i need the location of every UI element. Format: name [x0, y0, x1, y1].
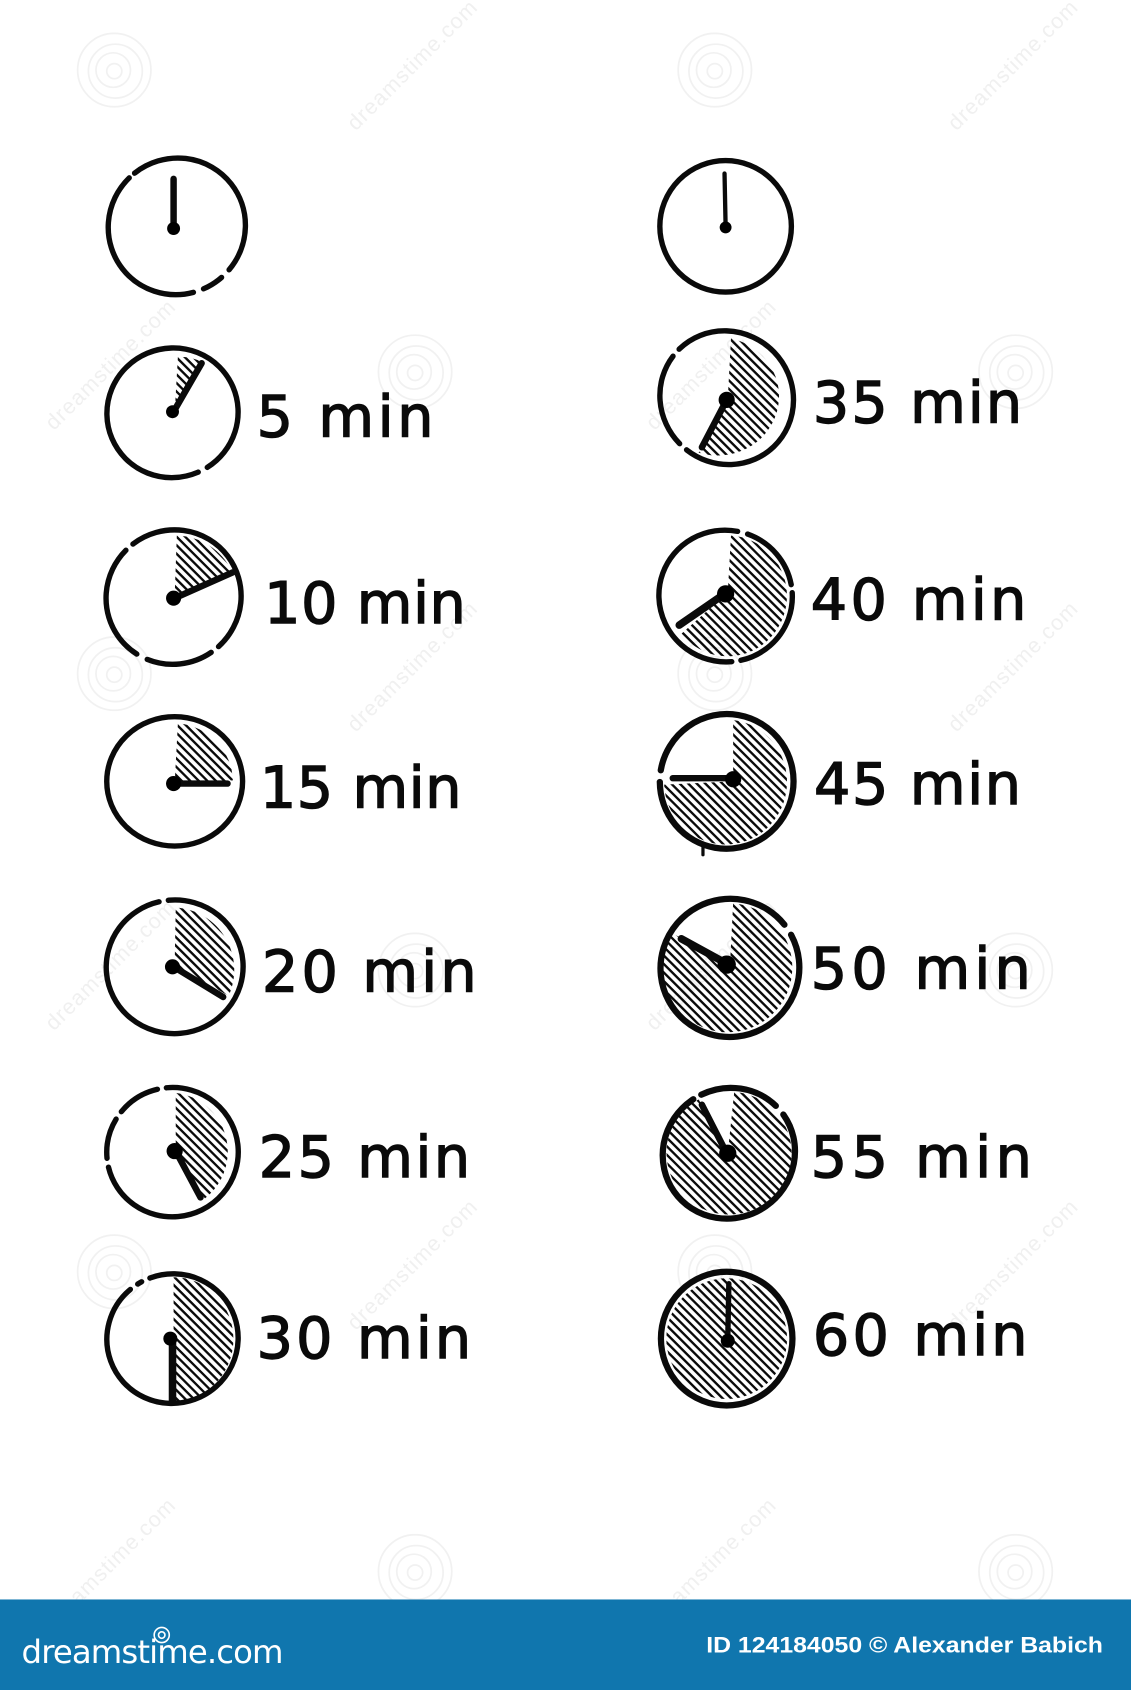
label: 20 min: 20 min [262, 940, 477, 1006]
clock: 15 min [107, 717, 243, 846]
clock: 40 min [640, 511, 811, 681]
label: 35 min: 35 min [813, 371, 1022, 436]
label: 55 min: 55 min [811, 1125, 1032, 1191]
footer bar [0, 1599, 1131, 1690]
watermark pattern: dreamstime.com [40, 294, 181, 435]
clock: 60 min [661, 1272, 792, 1405]
clock: right column start, 0 min [660, 161, 791, 292]
clock: 5 min [87, 328, 258, 498]
label: 10 min: 10 min [264, 571, 466, 637]
label: 60 min: 60 min [813, 1303, 1027, 1369]
clock: 45 min [649, 703, 804, 859]
label: 45 min: 45 min [814, 752, 1021, 818]
label: 40 min: 40 min [811, 568, 1026, 634]
label: 15 min: 15 min [260, 755, 461, 821]
image credit: ID 124184050 © Alexander Babich [706, 1632, 1103, 1657]
clock: 30 min [89, 1255, 256, 1422]
watermark pattern: dreamstime.com [40, 894, 181, 1035]
clock: left column start, 0 min [81, 130, 273, 322]
watermark pattern: dreamstime.com [342, 596, 483, 736]
clock: 50 min [636, 874, 824, 1061]
label: 30 min: 30 min [257, 1306, 471, 1372]
watermark pattern: dreamstime.com [640, 1492, 781, 1633]
watermark pattern: dreamstime.com [942, 596, 1083, 736]
clock: 55 min [637, 1062, 821, 1245]
label: 5 min: 5 min [257, 385, 433, 451]
watermark pattern: dreamstime.com [942, 1194, 1083, 1335]
watermark pattern: dreamstime.com [40, 1492, 181, 1633]
clock: 20 min [101, 894, 249, 1039]
clock: 35 min [632, 303, 821, 492]
icon: dreamstime spiral [154, 1627, 169, 1643]
watermark pattern: dreamstime.com [640, 894, 781, 1035]
brand name: dreamstime.com [22, 1633, 284, 1671]
label: 25 min: 25 min [259, 1125, 470, 1191]
watermark pattern: dreamstime.com [342, 1194, 483, 1335]
clock: 10 min [79, 503, 268, 691]
label: 50 min: 50 min [811, 936, 1031, 1002]
watermark pattern: dreamstime.com [640, 294, 781, 435]
clock: 25 min [101, 1082, 244, 1222]
